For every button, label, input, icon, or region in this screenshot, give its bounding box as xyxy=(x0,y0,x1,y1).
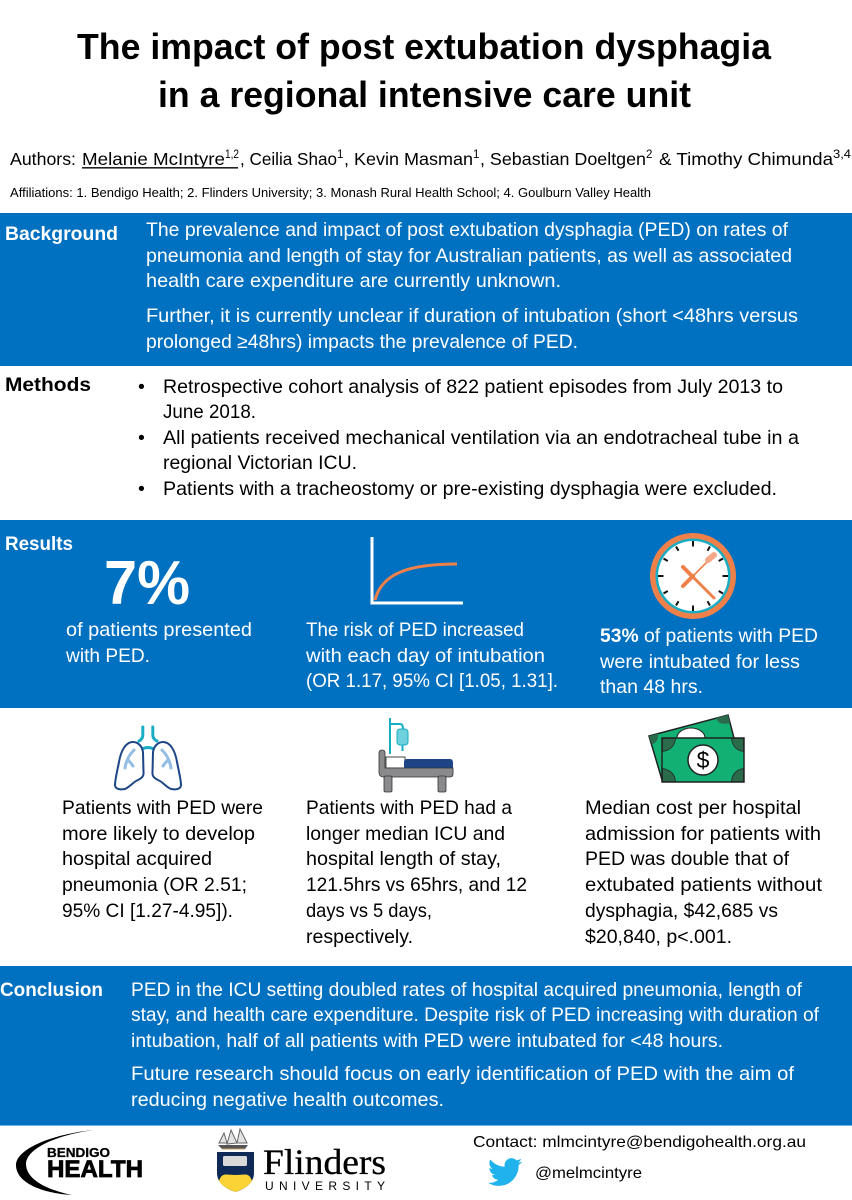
text: pneumonia xyxy=(62,797,263,922)
panel: conclusion: reducing negative health outcomes. xyxy=(131,1089,444,1111)
text: cost: PED was double that of xyxy=(585,848,790,870)
logo: Bendigo Health: BENDIGO xyxy=(47,1145,110,1160)
authors xyxy=(10,149,852,169)
panel: methods: • xyxy=(138,376,145,398)
panel: conclusion: PED in the ICU setting doubled rates of hospital acquired pneumonia, length of xyxy=(131,979,803,1001)
panel: methods: June 2018. xyxy=(163,401,256,423)
authors: Authors: xyxy=(10,149,76,169)
text: cost: extubated patients without xyxy=(585,874,823,896)
icon: lungs xyxy=(115,727,181,789)
panel: background xyxy=(0,213,852,366)
panel: conclusion: stay, and health care expenditure. Despite risk of PED increasing with duration of xyxy=(131,1004,820,1026)
text: length of stay: Patients with PED had a xyxy=(306,797,512,819)
text: cost: dysphagia, $42,685 vs xyxy=(585,900,778,922)
authors: & Timothy Chimunda xyxy=(659,149,833,169)
text: length of stay: respectively. xyxy=(306,926,413,948)
text: 53 percent: 53% of patients with PED xyxy=(600,625,818,647)
text: pneumonia: Patients with PED were xyxy=(62,797,263,819)
stat: 7 percent: of patients presented xyxy=(66,619,252,641)
authors: , Sebastian Doeltgen xyxy=(480,149,646,169)
authors: 2 xyxy=(646,149,652,161)
stat: 7 percent xyxy=(65,549,252,667)
stat: 7 percent: 7% xyxy=(104,549,190,618)
text: cost: $20,840, p<.001. xyxy=(585,926,732,948)
stat: 7 percent: with PED. xyxy=(65,645,150,667)
authors: , Ceilia Shao xyxy=(240,149,337,169)
text: risk of PED xyxy=(305,619,558,692)
twitter handle: @melmcintyre xyxy=(535,1165,642,1182)
icon: risk curve chart xyxy=(372,537,463,603)
text: risk of PED: with each day of intubation xyxy=(305,645,545,667)
panel: background: Background xyxy=(5,223,118,245)
text: cost: admission for patients with xyxy=(585,823,821,845)
text: length of stay: hospital length of stay, xyxy=(306,848,501,870)
icon: clock with fork and knife xyxy=(650,533,736,619)
title xyxy=(77,26,772,115)
authors: , Kevin Masman xyxy=(344,149,473,169)
logo: Bendigo Health: HEALTH xyxy=(47,1156,143,1183)
panel: background: The prevalence and impact of post extubation dysphagia (PED) on rates of xyxy=(146,219,789,241)
text: risk of PED: (OR 1.17, 95% CI [1.05, 1.31]. xyxy=(306,670,558,692)
icon: banknotes: $ xyxy=(697,747,710,773)
text: 53 percent xyxy=(599,625,818,698)
panel: methods: Methods xyxy=(5,374,91,396)
authors: 1 xyxy=(337,149,343,161)
text: length of stay: 121.5hrs vs 65hrs, and 12 xyxy=(306,874,527,896)
panel: methods: • xyxy=(138,427,145,449)
panel: conclusion xyxy=(0,966,852,1126)
logo: Flinders University xyxy=(217,1129,386,1193)
authors: 3,4 xyxy=(833,149,852,161)
panel: results: Results xyxy=(5,533,73,555)
panel: background: pneumonia and length of stay for Australian patients, as well as associated xyxy=(146,245,792,267)
text: 53 percent: than 48 hrs. xyxy=(600,676,703,698)
text: cost xyxy=(585,797,823,948)
text: cost: Median cost per hospital xyxy=(585,797,801,819)
logo: Bendigo Health xyxy=(16,1130,143,1195)
logo: Flinders University: UNIVERSITY xyxy=(265,1179,385,1193)
panel: results xyxy=(0,520,852,708)
panel: methods: • xyxy=(138,478,145,500)
affiliations: Affiliations: 1. Bendigo Health; 2. Flinders University; 3. Monash Rural Health School; 4. Goulburn Valley Health xyxy=(10,185,651,200)
title: The impact of post extubation dysphagia xyxy=(77,26,772,67)
panel: methods: All patients received mechanical ventilation via an endotracheal tube in a xyxy=(163,427,799,449)
text: length of stay xyxy=(306,797,527,948)
icon: banknotes xyxy=(649,715,744,782)
logo: Flinders University: Flinders xyxy=(263,1142,386,1182)
panel: conclusion: Future research should focus on early identification of PED with the aim of xyxy=(131,1063,795,1085)
text: pneumonia: 95% CI [1.27-4.95]). xyxy=(62,900,233,922)
panel: background: Further, it is currently unclear if duration of intubation (short <48hrs versus xyxy=(146,305,798,327)
text: pneumonia: hospital acquired xyxy=(62,848,212,870)
panel: methods: Patients with a tracheostomy or pre-existing dysphagia were excluded. xyxy=(163,478,777,500)
icon: twitter bird xyxy=(488,1158,522,1186)
authors: Melanie McIntyre xyxy=(82,149,225,169)
text: length of stay: days vs 5 days, xyxy=(306,900,432,922)
authors: 1 xyxy=(473,149,479,161)
panel: background: health care expenditure are currently unknown. xyxy=(146,270,561,292)
text: risk of PED: The risk of PED increased xyxy=(306,619,524,641)
text: pneumonia: pneumonia (OR 2.51; xyxy=(62,874,247,896)
contact: Contact: mlmcintyre@bendigohealth.org.au xyxy=(473,1134,806,1151)
text: length of stay: longer median ICU and xyxy=(306,823,505,845)
title: in a regional intensive care unit xyxy=(158,74,691,115)
panel: methods: regional Victorian ICU. xyxy=(163,452,357,474)
text: pneumonia: more likely to develop xyxy=(62,823,255,845)
panel: conclusion: Conclusion xyxy=(0,979,103,1001)
text: 53 percent: were intubated for less xyxy=(599,651,800,673)
panel: methods xyxy=(5,374,799,500)
icon: hospital bed with drip xyxy=(379,718,453,792)
panel: background: prolonged ≥48hrs) impacts the prevalence of PED. xyxy=(146,331,578,353)
panel: methods: Retrospective cohort analysis of 822 patient episodes from July 2013 to xyxy=(163,376,783,398)
panel: conclusion: intubation, half of all patients with PED were intubated for <48 hours. xyxy=(131,1030,723,1052)
authors: 1,2 xyxy=(225,149,239,161)
